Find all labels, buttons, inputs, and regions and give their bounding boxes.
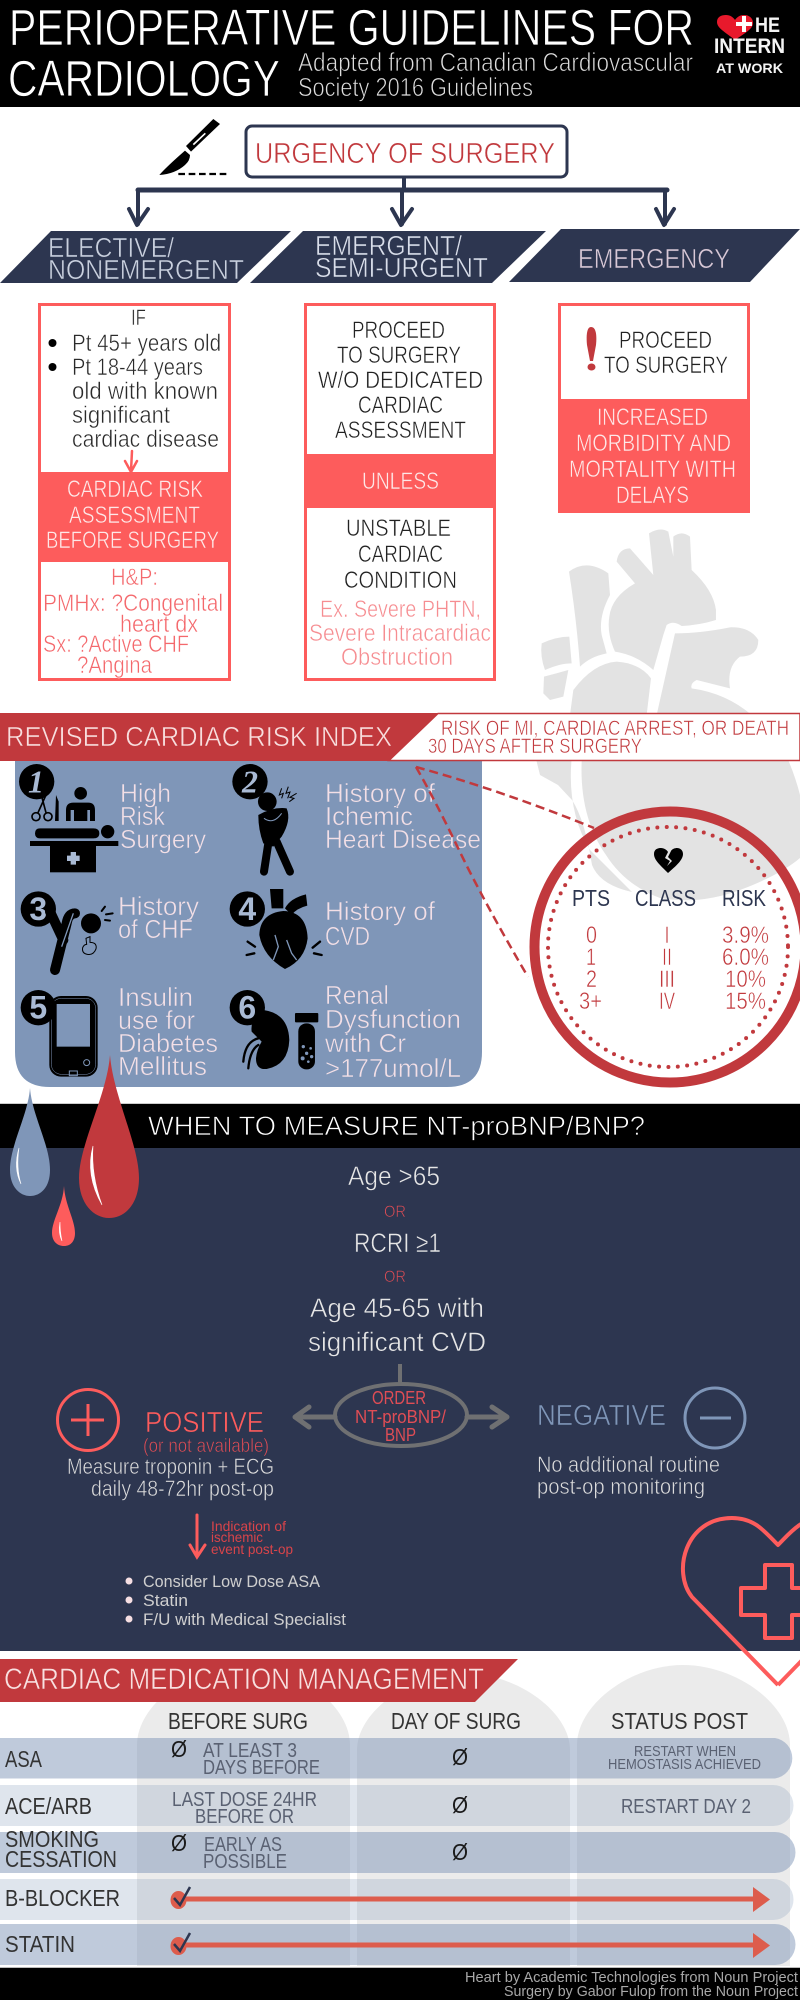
- risk factor 1: high risk surgery: 1: [28, 764, 44, 800]
- risk factor 5: insulin use for diabetes mellitus: use for: [118, 1005, 195, 1035]
- flow node: order test with arrows: NT-proBNP/: [355, 1407, 446, 1427]
- callout: increased morbidity: DELAYS: [616, 482, 689, 509]
- credits: Heart by Academic Technologies from Noun Project: [465, 1969, 799, 1986]
- hold symbols: [171, 1736, 468, 1865]
- text block: proceed to surgery without assessment: CARDIAC: [358, 392, 443, 419]
- text block: negative result: NEGATIVE: [537, 1400, 666, 1432]
- hold symbols: Ø: [452, 1744, 468, 1770]
- arrow: ischemic event: Indication of: [211, 1518, 286, 1534]
- before surgery instructions: LAST DOSE 24HR: [172, 1789, 317, 1811]
- table rows: 3+: [579, 988, 602, 1015]
- icon: large grey anatomical heart: [535, 530, 800, 900]
- text block: history and physical: PMHx: ?Congenital: [43, 590, 223, 617]
- text block: positive result: [67, 1407, 274, 1501]
- text block: if criteria: Pt 18-44 years: [72, 354, 203, 381]
- column headers: STATUS POST: [611, 1708, 748, 1734]
- table rows: III: [659, 966, 675, 993]
- text block: criteria: RCRI ≥1: [354, 1228, 441, 1258]
- text block: examples: Ex. Severe PHTN,: [320, 596, 481, 623]
- status post instructions: HEMOSTASIS ACHIEVED: [608, 1756, 761, 1773]
- risk factor 6: renal dysfunction: with Cr: [324, 1028, 406, 1058]
- risk factor 6: renal dysfunction: Dysfunction: [325, 1004, 461, 1034]
- text block: if criteria: [48, 305, 221, 453]
- risk factor 1: high risk surgery: Surgery: [120, 824, 206, 854]
- logo: The Intern at Work: HE: [755, 14, 780, 37]
- column headers: DAY OF SURG: [391, 1708, 521, 1734]
- table rows: I: [665, 922, 669, 949]
- text block: proceed to surgery without assessment: [318, 317, 483, 444]
- hold symbols: Ø: [452, 1792, 468, 1818]
- connector: dashed callout lines: [416, 767, 594, 977]
- heading: emergent / semi-urgent: EMERGENT/: [315, 230, 462, 261]
- callout: cardiac risk assessment: CARDIAC RISK: [67, 476, 203, 503]
- callout: risk table circle: [534, 812, 800, 1082]
- text block: if criteria: IF: [131, 305, 146, 330]
- text block: history and physical: H&P:: [111, 564, 158, 591]
- before surgery instructions: POSSIBLE: [203, 1851, 287, 1873]
- text block: history and physical: Sx: ?Active CHF: [43, 631, 189, 658]
- icon: exclamation mark: [587, 327, 596, 370]
- text block: proceed to surgery: PROCEED: [619, 327, 712, 354]
- text block: unstable cardiac condition: CONDITION: [344, 567, 457, 594]
- logo: The Intern at Work: INTERN: [714, 35, 785, 58]
- row labels: ACE/ARB: [5, 1793, 92, 1819]
- credits: [465, 1969, 799, 2000]
- risk factor 2: history of ischemic heart disease: Ichemic: [325, 801, 413, 831]
- before surgery instructions: [172, 1740, 320, 1873]
- arrow: ischemic event: ischemic: [211, 1529, 263, 1545]
- footer: [0, 1967, 800, 2000]
- icon: broken heart: [654, 848, 683, 873]
- result: positive: [58, 1390, 274, 1501]
- risk factor 6: renal dysfunction: 6: [238, 990, 256, 1026]
- heading: elective / nonemergent: ELECTIVE/: [48, 232, 174, 263]
- callout: unless: UNLESS: [362, 468, 439, 495]
- text block: negative result: post-op monitoring: [537, 1474, 705, 1499]
- text block: unstable cardiac condition: UNSTABLE: [346, 515, 451, 542]
- text block: proceed to surgery without assessment: ASSESSMENT: [335, 417, 466, 444]
- icon: heart with cross outline: [683, 1518, 800, 1685]
- before surgery instructions: EARLY AS: [204, 1834, 282, 1856]
- text block: negative result: No additional routine: [537, 1452, 720, 1477]
- text block: risk definition: 30 DAYS AFTER SURGERY: [428, 735, 642, 758]
- risk factor 2: history of ischemic heart disease: [232, 764, 481, 872]
- header band: [0, 0, 800, 107]
- subtitle: Adapted from Canadian Cardiovascular: [298, 47, 693, 77]
- table rows: [579, 922, 769, 1015]
- status post instructions: [608, 1743, 761, 1818]
- result: negative: [537, 1388, 745, 1499]
- logo: The Intern at Work: AT WORK: [716, 60, 783, 76]
- panel: emergent pathway: [304, 304, 496, 680]
- risk factor 6: renal dysfunction: >177umol/L: [325, 1053, 461, 1083]
- row labels: STATIN: [5, 1931, 75, 1957]
- text block: positive result: Measure troponin + ECG: [67, 1454, 274, 1479]
- risk factor 4: history of CVD: History of: [325, 896, 436, 926]
- subtitle: [298, 47, 693, 102]
- text block: criteria: significant CVD: [308, 1327, 486, 1357]
- text block: criteria: OR: [384, 1267, 406, 1286]
- arrow: b-blocker continue: [170, 1887, 770, 1912]
- table rows: 3.9%: [722, 922, 769, 949]
- table header: CLASS: [635, 885, 696, 911]
- risk factor 3: history of CHF: History: [118, 891, 199, 921]
- risk factor 5: insulin use for diabetes mellitus: Insulin: [118, 982, 193, 1012]
- list: post-op management: Statin: [143, 1591, 188, 1610]
- risk factor 1: high risk surgery: [19, 764, 206, 872]
- table header: [572, 885, 767, 911]
- icon: plus: [58, 1390, 118, 1450]
- panel: cardiac risk factors: [15, 755, 482, 1087]
- text block: if criteria: significant: [72, 402, 170, 429]
- banner: revised cardiac risk index: REVISED CARDIAC RISK INDEX: [6, 721, 392, 752]
- before surgery instructions: BEFORE OR: [195, 1806, 294, 1828]
- callout: increased morbidity: [558, 399, 750, 513]
- arrow: statin continue: [170, 1933, 770, 1958]
- before surgery instructions: AT LEAST 3: [203, 1740, 297, 1762]
- table header: RISK: [722, 885, 767, 911]
- table rows: 0: [586, 922, 597, 949]
- row labels: ASA: [5, 1746, 43, 1772]
- row labels: CESSATION: [5, 1846, 117, 1872]
- text block: proceed to surgery without assessment: TO SURGERY: [337, 342, 461, 369]
- text block: unstable cardiac condition: CARDIAC: [358, 541, 443, 568]
- panel: emergency pathway: [558, 304, 750, 513]
- text block: history and physical: ?Angina: [77, 652, 153, 679]
- risk factor 1: high risk surgery: High: [120, 778, 171, 808]
- row labels: [5, 1746, 120, 1957]
- risk factor 4: history of CVD: 4: [238, 891, 256, 927]
- row labels: SMOKING: [5, 1826, 99, 1852]
- risk factor 4: history of CVD: [230, 889, 436, 969]
- heading: emergent / semi-urgent: SEMI-URGENT: [315, 252, 488, 283]
- flow node: order test with arrows: ORDER: [372, 1388, 426, 1408]
- risk factor 3: history of CHF: of CHF: [118, 914, 193, 944]
- text block: proceed to surgery: TO SURGERY: [604, 352, 728, 379]
- banner: revised cardiac risk index: [0, 713, 800, 761]
- heading box: urgency of surgery: URGENCY OF SURGERY: [255, 138, 555, 170]
- table rows: IV: [659, 988, 675, 1015]
- panel: elective pathway: [38, 304, 231, 680]
- heading: elective / nonemergent: NONEMERGENT: [48, 254, 244, 285]
- risk factor 1: high risk surgery: Risk: [120, 801, 166, 831]
- heading: elective / nonemergent: [0, 231, 291, 285]
- flow node: order test with arrows: [295, 1364, 507, 1446]
- panel: when to measure NT-proBNP/BNP: [0, 1055, 800, 1651]
- text block: risk definition: [428, 717, 789, 758]
- icon: blood drops: [10, 1055, 139, 1246]
- text block: proceed to surgery without assessment: W/O DEDICATED: [318, 367, 483, 394]
- text block: history and physical: [43, 564, 223, 679]
- row labels: B-BLOCKER: [5, 1885, 120, 1911]
- risk factor 6: renal dysfunction: Renal: [325, 980, 389, 1010]
- risk factor 5: insulin use for diabetes mellitus: Diabetes: [118, 1028, 218, 1058]
- table rows: 15%: [725, 988, 766, 1015]
- text block: criteria: Age 45-65 with: [310, 1293, 484, 1323]
- risk factor 5: insulin use for diabetes mellitus: Mellitus: [118, 1051, 207, 1081]
- callout: increased morbidity: INCREASED: [597, 404, 708, 431]
- before surgery instructions: DAYS BEFORE: [203, 1757, 320, 1779]
- text block: positive result: daily 48-72hr post-op: [91, 1476, 274, 1501]
- heading box: urgency of surgery: [246, 126, 567, 177]
- arrow: ischemic event: event post-op: [211, 1541, 293, 1557]
- table row bars: [0, 1738, 796, 1965]
- column arches: [137, 1665, 790, 1966]
- column headers: BEFORE SURG: [168, 1708, 308, 1734]
- icon: minus: [685, 1388, 745, 1448]
- table rows: 1: [586, 944, 596, 971]
- arrows: urgency branches: [129, 178, 674, 225]
- risk factor 2: history of ischemic heart disease: History of: [325, 778, 436, 808]
- callout: cardiac risk assessment: BEFORE SURGERY: [46, 527, 219, 554]
- column headers: [168, 1708, 748, 1734]
- table header: PTS: [572, 885, 610, 911]
- risk factor 2: history of ischemic heart disease: 2: [241, 764, 258, 800]
- text block: proceed to surgery: [604, 327, 728, 379]
- callout: increased morbidity: MORTALITY WITH: [569, 456, 736, 483]
- list: post-op management: F/U with Medical Specialist: [143, 1610, 346, 1629]
- risk factor 6: renal dysfunction: [230, 980, 461, 1083]
- text block: unstable cardiac condition: [344, 515, 457, 594]
- text block: examples: [309, 596, 491, 671]
- arrow: to cardiac risk assessment: [125, 451, 137, 472]
- heading: emergent / semi-urgent: [250, 230, 546, 283]
- text block: criteria: OR: [384, 1202, 406, 1221]
- hold symbols: Ø: [171, 1830, 187, 1856]
- subtitle: Society 2016 Guidelines: [298, 72, 533, 102]
- hold symbols: Ø: [452, 1839, 468, 1865]
- flow node: order test with arrows: BNP: [385, 1425, 416, 1445]
- risk factor 3: history of CHF: [21, 891, 199, 970]
- text block: examples: Severe Intracardiac: [309, 620, 491, 647]
- status post instructions: RESTART DAY 2: [621, 1796, 751, 1818]
- heading band: [0, 1103, 800, 1148]
- heading: emergency: EMERGENCY: [578, 243, 730, 274]
- text block: if criteria: old with known: [72, 378, 218, 405]
- text block: if criteria: cardiac disease: [72, 426, 219, 453]
- hold symbols: Ø: [171, 1736, 187, 1762]
- arrow: ischemic event: [190, 1515, 293, 1557]
- list: post-op management: [126, 1572, 346, 1629]
- title: [8, 0, 694, 107]
- risk factor 4: history of CVD: CVD: [325, 921, 370, 951]
- table rows: 10%: [725, 966, 766, 993]
- callout: cardiac risk assessment: [38, 472, 231, 562]
- callout: increased morbidity: MORBIDITY AND: [576, 430, 731, 457]
- text block: examples: Obstruction: [341, 644, 453, 671]
- table rows: 6.0%: [722, 944, 769, 971]
- text block: history and physical: heart dx: [120, 611, 198, 638]
- table rows: II: [662, 944, 672, 971]
- text block: positive result: (or not available): [143, 1436, 269, 1457]
- title: CARDIOLOGY: [8, 50, 280, 107]
- list: post-op management: Consider Low Dose ASA: [143, 1572, 321, 1591]
- text block: if criteria: Pt 45+ years old: [72, 330, 221, 357]
- risk factor 5: insulin use for diabetes mellitus: [21, 982, 218, 1081]
- table rows: 2: [586, 966, 597, 993]
- panel: cardiac medication management: [0, 1659, 796, 1966]
- risk factor 2: history of ischemic heart disease: Heart Disease: [325, 824, 481, 854]
- text block: proceed to surgery without assessment: PROCEED: [352, 317, 445, 344]
- text block: criteria: Age >65: [348, 1161, 440, 1191]
- risk factor 5: insulin use for diabetes mellitus: 5: [29, 990, 47, 1026]
- icon: scalpel: [159, 119, 227, 175]
- logo: The Intern at Work: [714, 14, 785, 76]
- text block: negative result: [537, 1400, 720, 1499]
- status post instructions: RESTART WHEN: [634, 1743, 736, 1760]
- banner heading: CARDIAC MEDICATION MANAGEMENT: [4, 1663, 484, 1696]
- text block: positive result: POSITIVE: [145, 1407, 264, 1439]
- heading band: WHEN TO MEASURE NT-proBNP/BNP?: [148, 1111, 645, 1141]
- risk factor 3: history of CHF: 3: [29, 891, 47, 927]
- callout: cardiac risk assessment: ASSESSMENT: [69, 502, 200, 529]
- callout: unless: [304, 454, 496, 508]
- heading: emergency: [509, 229, 800, 282]
- text block: criteria: [308, 1161, 486, 1357]
